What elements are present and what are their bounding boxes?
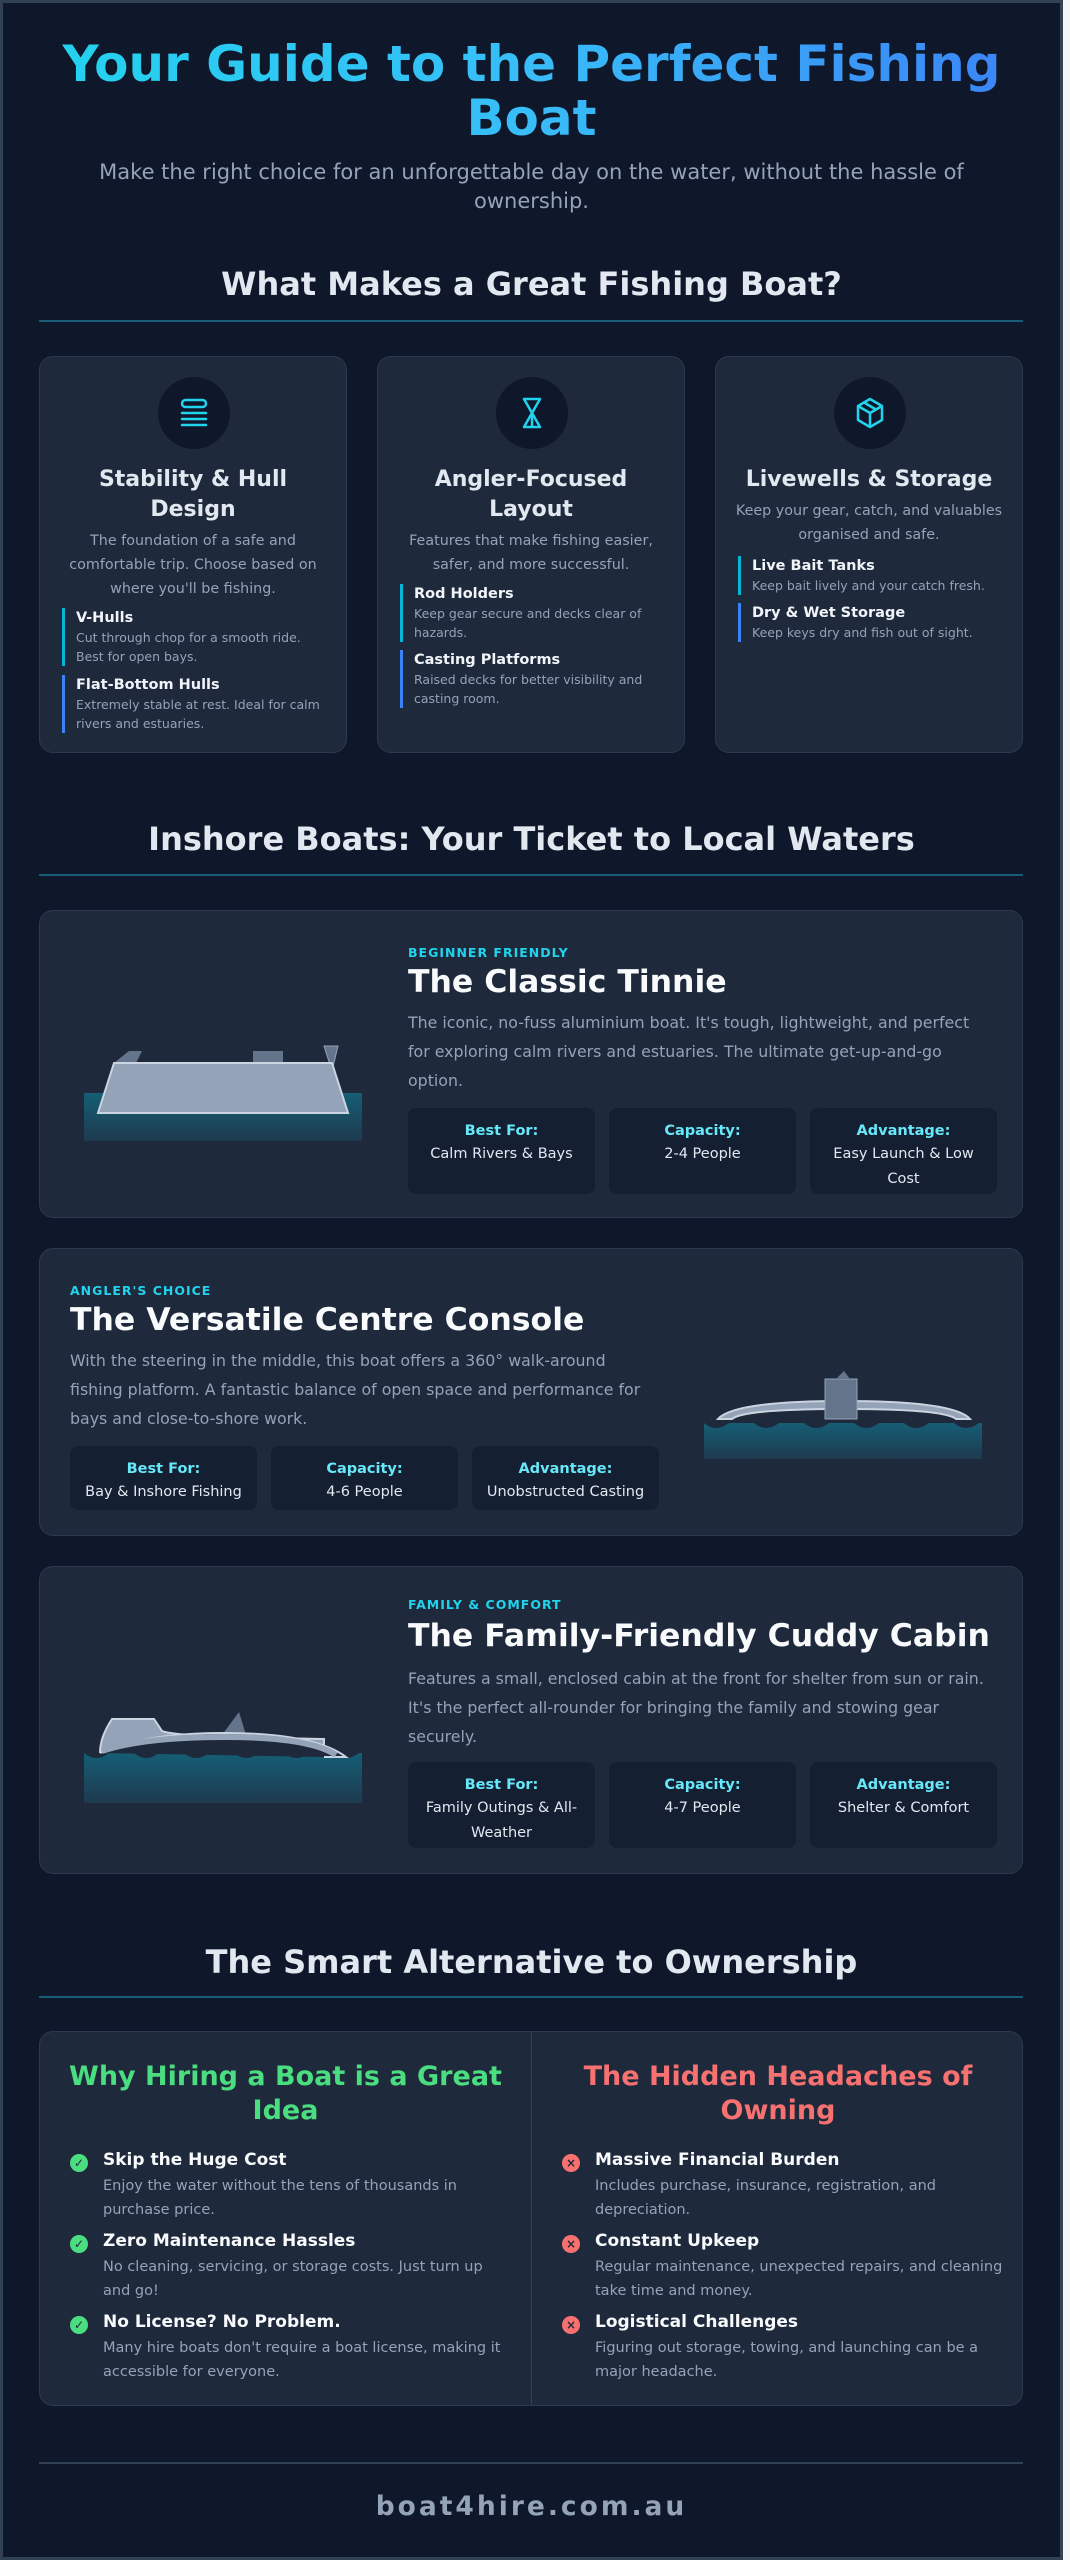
- feature: v-hulls: [62, 608, 328, 666]
- stats: [70, 1446, 659, 1510]
- card title: Livewells & Storage: [746, 467, 992, 492]
- item: financial burden: ×: [566, 2156, 576, 2170]
- tag: FAMILY & COMFORT: [408, 1597, 562, 1612]
- heading: smart alternative: The Smart Alternative to Ownership: [206, 1943, 857, 1981]
- boat title: The Family-Friendly Cuddy Cabin: [408, 1618, 990, 1654]
- feature: flat-bottom: Flat-Bottom Hulls: [76, 677, 220, 693]
- stat: advantage: Advantage:: [857, 1123, 950, 1139]
- feature: v-hulls: Cut through chop for a smooth ride. Best for open bays.: [76, 630, 301, 664]
- feature: casting platforms: [400, 650, 666, 708]
- item: logistics: Logistical Challenges: [595, 2312, 798, 2332]
- stat: advantage: Shelter & Comfort: [838, 1800, 969, 1816]
- feature: casting platforms: Raised decks for better visibility and casting room.: [414, 672, 642, 706]
- boat description: Features a small, enclosed cabin at the front for shelter from sun or rain. It's the perfect all-rounder for bringing the family and stowing gear securely.: [408, 1669, 984, 1746]
- heading: what makes: What Makes a Great Fishing Boat?: [221, 265, 842, 303]
- subtitle: Make the right choice for an unforgettable day on the water, without the hassle of ownership.: [99, 160, 964, 213]
- feature: v-hulls: V-Hulls: [76, 610, 133, 626]
- stat: advantage: [810, 1108, 997, 1194]
- stat: advantage: Advantage:: [519, 1461, 612, 1477]
- feature: rod holders: Rod Holders: [414, 586, 514, 602]
- card title: Layout: [489, 497, 573, 522]
- item: zero maintenance: [70, 2231, 483, 2299]
- boat title: The Versatile Centre Console: [70, 1302, 584, 1338]
- item: upkeep: Constant Upkeep: [595, 2231, 759, 2251]
- icon: hull layers: [158, 377, 230, 449]
- stat: advantage: Unobstructed Casting: [487, 1484, 644, 1500]
- panel: angler layout: [377, 356, 685, 753]
- item: zero maintenance: No cleaning, servicing, or storage costs. Just turn up and go!: [103, 2259, 483, 2299]
- heading: hidden headaches: The Hidden Headaches of Owning: [584, 2061, 972, 2126]
- item: financial burden: Includes purchase, insurance, registration, and depreciation.: [595, 2178, 936, 2218]
- card title: [99, 467, 287, 522]
- stat: capacity: [609, 1762, 796, 1848]
- item: financial burden: Massive Financial Burden: [595, 2150, 839, 2170]
- stat: capacity: 4-7 People: [664, 1800, 741, 1816]
- item: no license: ✓: [74, 2318, 84, 2332]
- stat: capacity: [609, 1108, 796, 1194]
- panel: tinnie: [39, 910, 1023, 1218]
- feature: rod holders: Keep gear secure and decks clear of hazards.: [414, 606, 641, 640]
- illustration: centre console: [704, 1371, 982, 1459]
- stat: capacity: [271, 1446, 458, 1510]
- item: no license: No License? No Problem.: [103, 2312, 341, 2332]
- stat: capacity: Capacity:: [664, 1777, 741, 1793]
- stat: advantage: [472, 1446, 659, 1510]
- tag: ANGLER'S CHOICE: [70, 1283, 211, 1298]
- item: logistics: ×: [566, 2318, 576, 2332]
- heading: why hiring: Why Hiring a Boat is a Great Idea: [69, 2061, 502, 2126]
- item: no license: Many hire boats don't require a boat license, making it accessible for everyone.: [103, 2340, 500, 2380]
- feature: flat-bottom: [62, 675, 328, 733]
- stat: best for: Calm Rivers & Bays: [430, 1146, 573, 1162]
- stat: best for: Best For:: [465, 1777, 538, 1793]
- feature: rod holders: [400, 584, 666, 642]
- icon: box: [834, 377, 906, 449]
- stat: advantage: Easy Launch & Low Cost: [833, 1146, 974, 1187]
- item: skip cost: Skip the Huge Cost: [103, 2150, 286, 2170]
- panel: cuddy cabin: [39, 1566, 1023, 1874]
- stat: advantage: [810, 1762, 997, 1848]
- feature: live bait: Live Bait Tanks: [752, 558, 875, 574]
- panel: livewells: [715, 356, 1023, 753]
- feature: live bait: Keep bait lively and your catch fresh.: [752, 578, 985, 593]
- item: skip cost: Enjoy the water without the tens of thousands in purchase price.: [103, 2178, 457, 2218]
- card description: Keep your gear, catch, and valuables organised and safe.: [736, 503, 1002, 543]
- stat: capacity: 4-6 People: [326, 1484, 403, 1500]
- item: logistics: Figuring out storage, towing, and launching can be a major headache.: [595, 2340, 978, 2380]
- panel: centre console: [39, 1248, 1023, 1536]
- boat description: The iconic, no-fuss aluminium boat. It's tough, lightweight, and perfect for exploring calm rivers and estuaries. The ultimate get-up-and-go option.: [408, 1013, 969, 1090]
- card title: Stability & Hull: [99, 467, 287, 492]
- item: upkeep: Regular maintenance, unexpected repairs, and cleaning take time and money.: [595, 2259, 1002, 2299]
- item: upkeep: ×: [566, 2237, 576, 2251]
- stat: best for: Family Outings & All-Weather: [426, 1800, 577, 1841]
- feature: casting platforms: Casting Platforms: [414, 652, 560, 668]
- stat: capacity: 2-4 People: [664, 1146, 741, 1162]
- card description: The foundation of a safe and comfortable trip. Choose based on where you'll be fishing.: [69, 533, 317, 597]
- feature: dry wet storage: Keep keys dry and fish out of sight.: [752, 625, 973, 640]
- item: zero maintenance: ✓: [74, 2237, 84, 2251]
- stat: best for: [70, 1446, 257, 1510]
- card title: [434, 467, 627, 522]
- panel: stability: [39, 356, 347, 753]
- boat title: The Classic Tinnie: [408, 964, 727, 1000]
- item: skip cost: [70, 2150, 457, 2218]
- tag: BEGINNER FRIENDLY: [408, 945, 569, 960]
- stat: best for: [408, 1762, 595, 1848]
- stats: [408, 1762, 997, 1848]
- heading: inshore: Inshore Boats: Your Ticket to Local Waters: [148, 820, 915, 858]
- feature: flat-bottom: Extremely stable at rest. Ideal for calm rivers and estuaries.: [76, 697, 320, 731]
- feature: dry wet storage: Dry & Wet Storage: [752, 605, 905, 621]
- card description: Features that make fishing easier, safer, and more successful.: [409, 533, 653, 573]
- stat: advantage: Advantage:: [857, 1777, 950, 1793]
- feature: dry wet storage: [738, 603, 1004, 642]
- icon: rod: [496, 377, 568, 449]
- boat description: With the steering in the middle, this boat offers a 360° walk-around fishing platform. A fantastic balance of open space and performance for bays and close-to-shore work.: [70, 1351, 640, 1428]
- item: logistics: [562, 2312, 978, 2380]
- item: financial burden: [562, 2150, 936, 2218]
- stats: [408, 1108, 997, 1194]
- stat: best for: Best For:: [127, 1461, 200, 1477]
- panel: comparison: [39, 2031, 1023, 2406]
- column: hiring benefits: [69, 2061, 502, 2380]
- illustration: tinnie: [84, 1046, 362, 1141]
- footer: website: boat4hire.com.au: [376, 2491, 687, 2522]
- feature: live bait: [738, 556, 1004, 595]
- stat: best for: Best For:: [465, 1123, 538, 1139]
- stat: capacity: Capacity:: [326, 1461, 403, 1477]
- card title: Angler-Focused: [435, 467, 627, 492]
- item: upkeep: [562, 2231, 1002, 2299]
- item: skip cost: ✓: [74, 2156, 84, 2170]
- card title: Design: [150, 497, 236, 522]
- stat: best for: [408, 1108, 595, 1194]
- stat: capacity: Capacity:: [664, 1123, 741, 1139]
- illustration: cuddy cabin: [84, 1712, 362, 1803]
- item: no license: [70, 2312, 500, 2380]
- stat: best for: Bay & Inshore Fishing: [85, 1484, 242, 1500]
- title: Your Guide to the Perfect Fishing Boat: [62, 35, 1000, 147]
- item: zero maintenance: Zero Maintenance Hassles: [103, 2231, 355, 2251]
- column: owning headaches: [562, 2061, 1002, 2380]
